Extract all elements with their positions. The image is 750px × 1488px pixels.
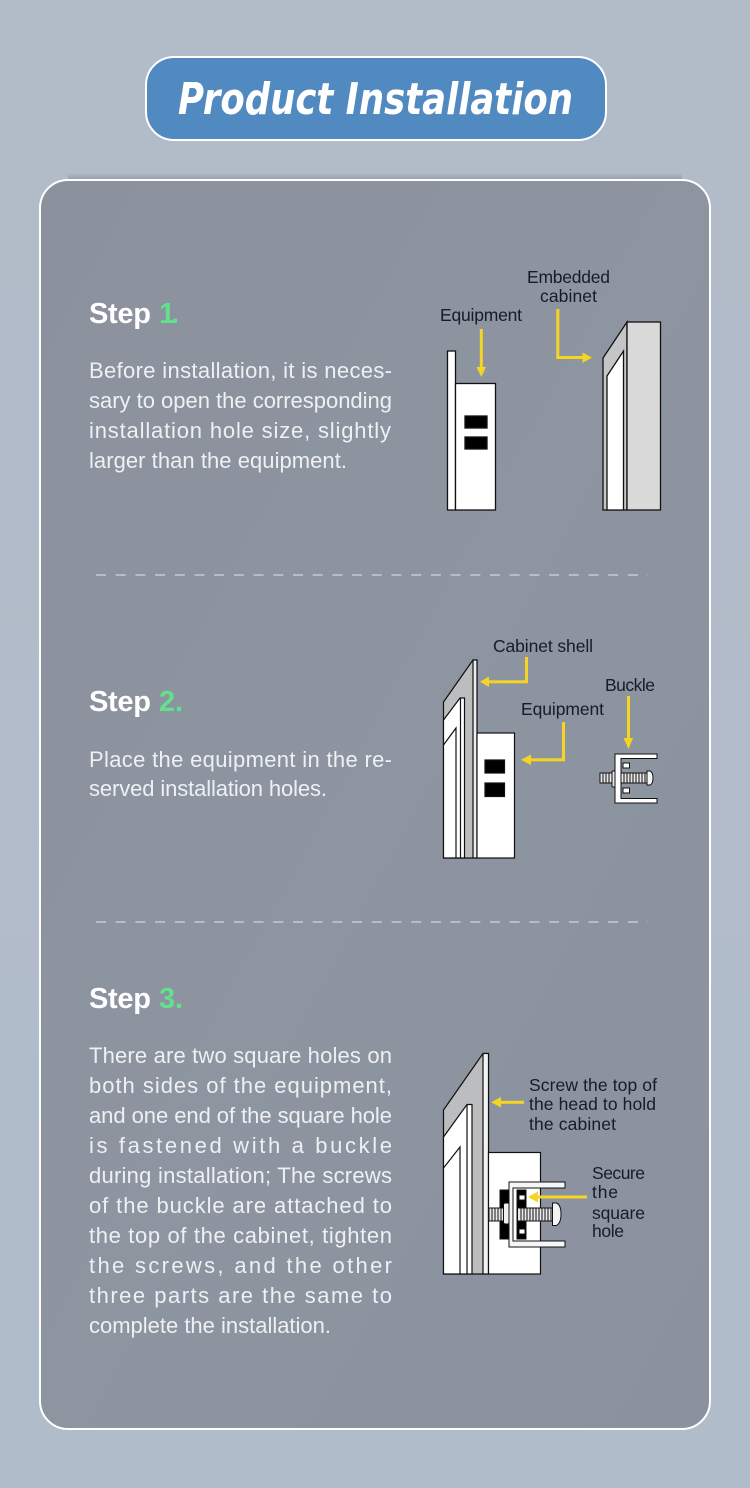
label: screw the top: the head to hold [529,1094,656,1114]
text block: step 3: and one end of the square hole [89,1103,392,1128]
text block: step 3: the screws, and the other [89,1253,392,1278]
text block: step 3: three parts are the same to [89,1283,392,1308]
equipment body with buckle [488,1152,565,1274]
heading: step 2: 2. [159,686,183,718]
label: screw the top [529,1075,657,1134]
text block: step 3: of the buckle are attached to [89,1193,392,1218]
text block: step 1: sary to open the corresponding [89,388,392,413]
heading: step 2: Step [89,686,151,718]
label: embedded cabinet: Embedded [527,267,610,287]
label: screw the top: Screw the top of [529,1075,657,1095]
heading: step 3 [89,983,183,1015]
text block: step 3: the top of the cabinet, tighten [89,1223,392,1248]
label: equipment: Equipment [521,699,604,719]
arrow: buckle [624,696,633,749]
label: equipment: Equipment [440,305,522,325]
text block: step 1: Before installation, it is neces- [89,358,392,383]
equipment [448,351,496,510]
text block: step 1 [89,358,392,473]
text block: step 3: both sides of the equipment, [89,1073,392,1098]
text block: step 2: Place the equipment in the re- [89,747,392,772]
arrow: screw the top [491,1097,524,1108]
heading: step 1: Step [89,298,151,330]
arrow: equipment [521,722,565,765]
panel: installation steps [40,173,710,1429]
heading: step 3: 3. [159,983,183,1015]
label: embedded cabinet [527,267,610,306]
buckle [600,754,657,803]
diagram: step 2 [444,636,657,858]
diagram: step 3 [444,1054,657,1274]
heading: step 2 [89,686,183,718]
embedded cabinet [603,322,660,510]
label: secure the square hole: hole [592,1221,624,1241]
text block: step 2 [89,747,392,801]
label: cabinet shell: Cabinet shell [493,636,593,656]
heading: step 1: 1. [159,298,179,330]
text block: step 3: complete the installation. [89,1313,331,1338]
diagram: step 1 [440,267,660,510]
text block: step 3: during installation; The screws [89,1163,392,1188]
label: buckle: Buckle [605,675,655,695]
text block: step 1: larger than the equipment. [89,448,347,473]
cabinet shell [444,660,477,858]
text block: step 1: installation hole size, slightly [89,418,391,443]
arrow: equipment [476,329,486,377]
heading: step 1 [89,298,179,330]
label: secure the square hole [592,1163,645,1241]
cabinet [444,1054,488,1274]
title badge [146,57,606,140]
text block: step 3: is fastened with a buckle [89,1133,392,1158]
text block: step 3 [89,1043,392,1338]
text block: step 3: There are two square holes on [89,1043,392,1068]
arrow: secure the square hole [528,1192,587,1202]
label: secure the square hole: Secure [592,1163,645,1183]
label: secure the square hole: the [592,1182,618,1202]
equipment [477,733,514,858]
arrow: embedded cabinet [556,309,592,363]
label: embedded cabinet: cabinet [540,286,597,306]
label: screw the top: the cabinet [529,1114,616,1134]
arrow: cabinet shell [480,657,528,687]
heading: step 3: Step [89,983,151,1015]
label: secure the square hole: square [592,1203,645,1223]
title: Product Installation [178,74,573,125]
text block: step 2: served installation holes. [89,776,327,801]
